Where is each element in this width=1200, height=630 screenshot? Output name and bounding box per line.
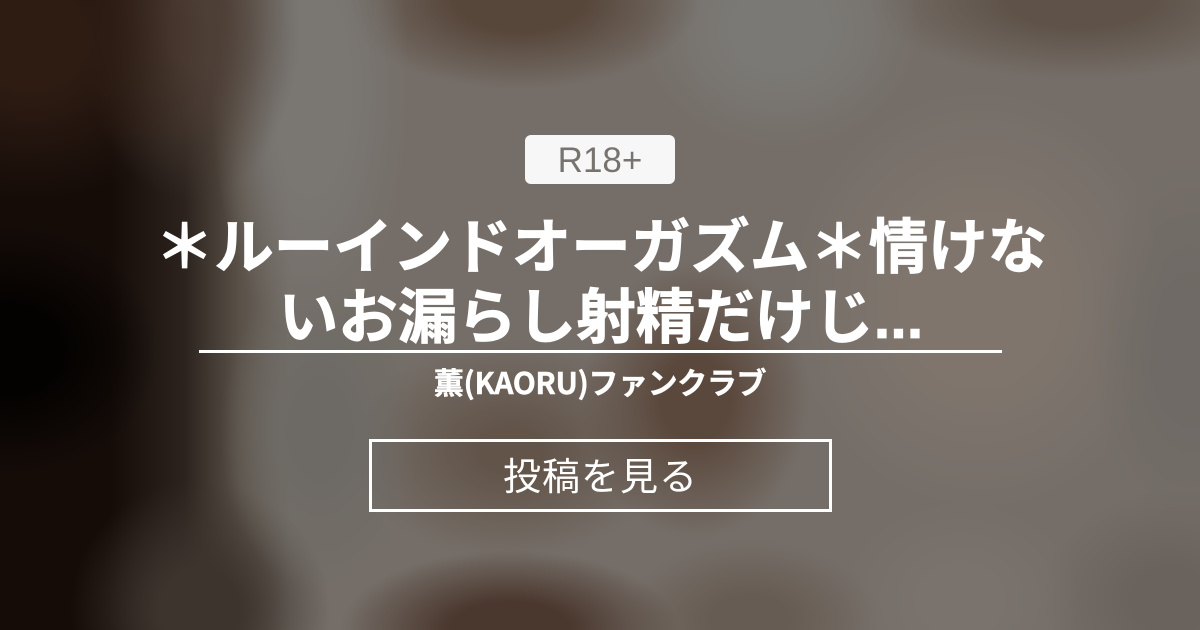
title xyxy=(155,214,1047,351)
title: いお漏らし射精だけじ... xyxy=(279,284,923,351)
creator name: 薫(KAORU)ファンクラブ xyxy=(434,359,766,403)
badge: R18+ xyxy=(525,135,675,184)
divider line xyxy=(199,350,1002,353)
title: ＊ルーインドオーガズム＊情けな xyxy=(155,214,1047,281)
badge: R18+: R18+ xyxy=(558,141,642,180)
button: view post xyxy=(369,439,832,512)
button: view post: 投稿を見る xyxy=(503,446,698,501)
